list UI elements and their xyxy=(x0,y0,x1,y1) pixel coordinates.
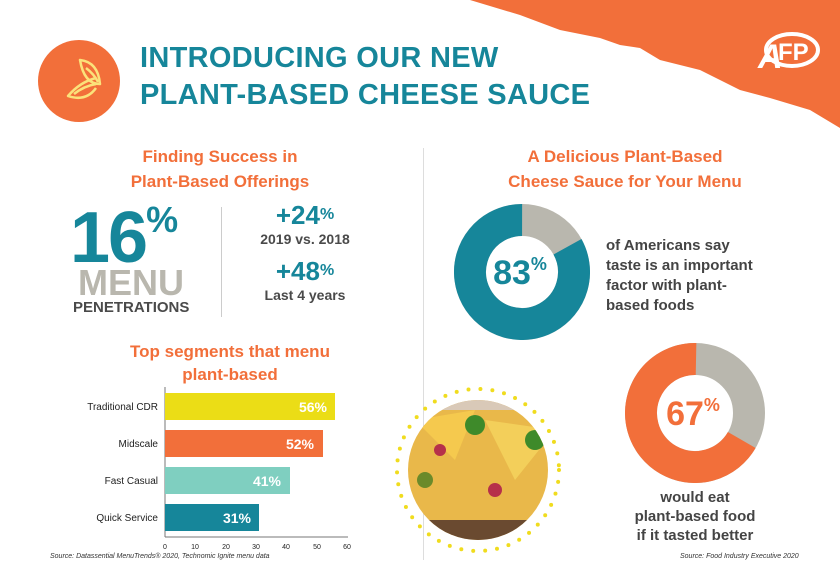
logo: AFP: A xyxy=(757,38,783,76)
donut 83%: 83 xyxy=(493,254,531,292)
icon: leaf circle xyxy=(38,40,120,122)
text: 67% caption: if it tasted better xyxy=(637,527,753,544)
source left: Source: Datassential MenuTrends® 2020, Technomic Ignite menu data xyxy=(50,553,270,560)
stats: growth: Last 4 years xyxy=(265,287,345,303)
title: INTRODUCING OUR NEW xyxy=(140,42,499,74)
bar chart: 41% xyxy=(253,473,282,489)
bar chart: 31% xyxy=(223,510,252,526)
stats: growth xyxy=(260,200,350,303)
bar chart xyxy=(87,387,351,550)
stats: growth: 2019 vs. 2018 xyxy=(260,231,350,247)
heading: top segments: Top segments that menu xyxy=(130,342,330,361)
text: 67% caption: plant-based food xyxy=(635,508,755,525)
bar chart: 56% xyxy=(299,399,328,415)
text: 67% caption xyxy=(635,489,755,544)
text: 83% caption xyxy=(606,237,753,314)
stats: growth: +48% xyxy=(276,256,334,286)
text: 83% caption: factor with plant- xyxy=(606,277,727,294)
heading: top segments: plant-based xyxy=(182,365,278,384)
heading: top segments xyxy=(130,342,330,384)
heading: finding success: Plant-Based Offerings xyxy=(131,172,309,191)
donut 83%: % xyxy=(531,254,547,274)
stat: 16% menu penetrations: PENETRATIONS xyxy=(73,299,189,316)
stat: 16% menu penetrations xyxy=(70,198,189,316)
title: PLANT-BASED CHEESE SAUCE xyxy=(140,79,590,111)
heading: finding success: Finding Success in xyxy=(143,147,297,166)
heading: delicious xyxy=(508,147,742,191)
heading: delicious: Cheese Sauce for Your Menu xyxy=(508,172,742,191)
logo: AFP xyxy=(757,32,820,76)
text: 83% caption: of Americans say xyxy=(606,237,730,254)
logo: AFP: FP xyxy=(778,39,809,66)
image: nachos xyxy=(395,387,561,553)
text: 83% caption: based foods xyxy=(606,297,694,314)
stats: growth: +24% xyxy=(276,200,334,230)
source right: Source: Food Industry Executive 2020 xyxy=(680,553,799,560)
heading: delicious: A Delicious Plant-Based xyxy=(528,147,722,166)
donut 67% xyxy=(625,343,765,483)
title xyxy=(140,42,590,111)
bar chart: 52% xyxy=(286,436,315,452)
stat: 16% menu penetrations: MENU xyxy=(78,262,184,303)
donut 67%: 67 xyxy=(666,395,704,433)
bar chart: Traditional CDR xyxy=(87,402,158,413)
donut 67%: % xyxy=(704,395,720,415)
heading: finding success xyxy=(131,147,309,191)
bar chart: Midscale xyxy=(119,439,158,450)
text: 67% caption: would eat xyxy=(660,489,730,506)
donut 83% xyxy=(454,204,590,340)
stat: 16% menu penetrations: 16% xyxy=(70,198,176,278)
bar chart: Quick Service xyxy=(96,513,158,524)
text: 83% caption: taste is an important xyxy=(606,257,753,274)
bar chart: Fast Casual xyxy=(105,476,158,487)
